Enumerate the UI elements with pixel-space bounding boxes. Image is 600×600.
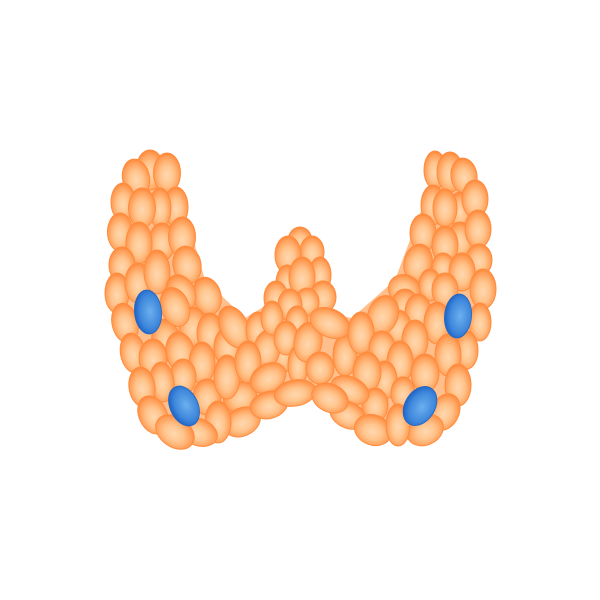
left lobe follicles: [105, 150, 294, 456]
blue nodule: upper right: [443, 293, 473, 339]
blue nodule: lower right: [396, 380, 444, 432]
right lobe follicles: [307, 151, 496, 452]
blue nodule: lower left: [162, 381, 206, 431]
isthmus and pyramidal lobe follicles: [261, 227, 357, 409]
blue nodule: upper left: [133, 289, 163, 335]
gland base silhouette: [115, 165, 488, 440]
